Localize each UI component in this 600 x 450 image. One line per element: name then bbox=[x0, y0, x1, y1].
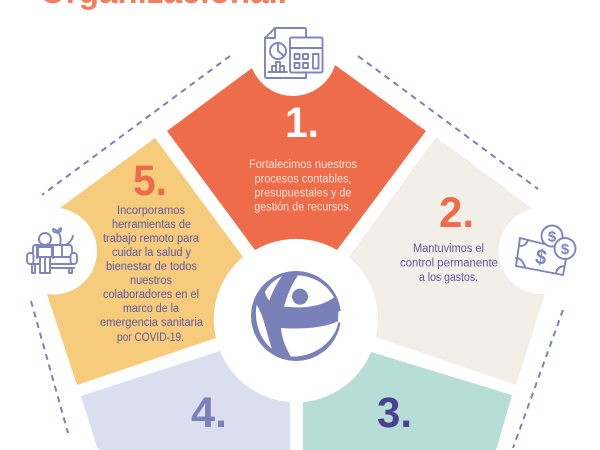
step 1 text: gestión de recursos. bbox=[254, 202, 352, 214]
step 4 number: 4. bbox=[191, 389, 227, 437]
icon: banknote and coins: $ bbox=[548, 228, 557, 246]
step 5 text: colaboradores en el bbox=[103, 289, 199, 301]
step 3 number: 3. bbox=[377, 389, 412, 437]
step 5 text: trabajo remoto para bbox=[103, 233, 200, 245]
step 5 number: 5. bbox=[133, 157, 167, 205]
dashed outline: lower right bbox=[513, 310, 563, 448]
step 5 text bbox=[100, 205, 204, 344]
step 5 text: herramientas de bbox=[112, 219, 191, 231]
step 1 text: procesos contables, bbox=[254, 174, 352, 186]
step 2 text: control permanente bbox=[400, 258, 498, 270]
icon: banknote and coins bbox=[516, 226, 576, 275]
panel: step 2 bbox=[349, 137, 545, 385]
step 1 text bbox=[249, 159, 357, 214]
panel: step 5 bbox=[47, 138, 243, 385]
logo: globe with figure bbox=[251, 271, 342, 361]
step 5 text: bienestar de todos bbox=[106, 261, 197, 273]
step 5 text: por COVID-19. bbox=[117, 332, 184, 344]
panel: step 4 bbox=[81, 351, 290, 450]
icon: banknote and coins: $ bbox=[533, 245, 549, 270]
step 5 text: marco de la bbox=[123, 303, 180, 315]
step 1 shape bbox=[167, 65, 426, 250]
step 2 text: Mantuvimos el bbox=[413, 243, 484, 255]
step 5 text: Incorporamos bbox=[117, 205, 185, 217]
dashed outline: top left bbox=[42, 56, 230, 195]
icon: person and pet on sofa bbox=[27, 228, 77, 273]
step 5 text: emergencia sanitaria bbox=[100, 317, 204, 329]
icon: banknote and coins: $ bbox=[561, 241, 570, 258]
dashed outline: top right bbox=[358, 56, 538, 189]
dashed outline: lower left bbox=[31, 301, 68, 433]
step 3 shape bbox=[303, 352, 512, 450]
step 2 text: a los gastos. bbox=[419, 272, 478, 284]
step 5 shape bbox=[47, 138, 243, 385]
panel: step 3 bbox=[303, 352, 512, 450]
step 4 shape bbox=[81, 351, 290, 450]
step 1 text: presupuestales y de bbox=[254, 188, 352, 200]
step 5 text: nuestros bbox=[130, 275, 172, 287]
panel: step 1 bbox=[167, 65, 426, 250]
step 2 shape bbox=[349, 137, 545, 385]
centre circle bbox=[215, 240, 377, 402]
step 1 number: 1. bbox=[285, 99, 319, 147]
step 2 number: 2. bbox=[439, 189, 474, 237]
step 2 text bbox=[400, 243, 498, 284]
step 1 text: Fortalecimos nuestros bbox=[249, 159, 357, 171]
step 5 text: cuidar la salud y bbox=[112, 247, 191, 259]
icon: report and calculator bbox=[265, 28, 322, 78]
